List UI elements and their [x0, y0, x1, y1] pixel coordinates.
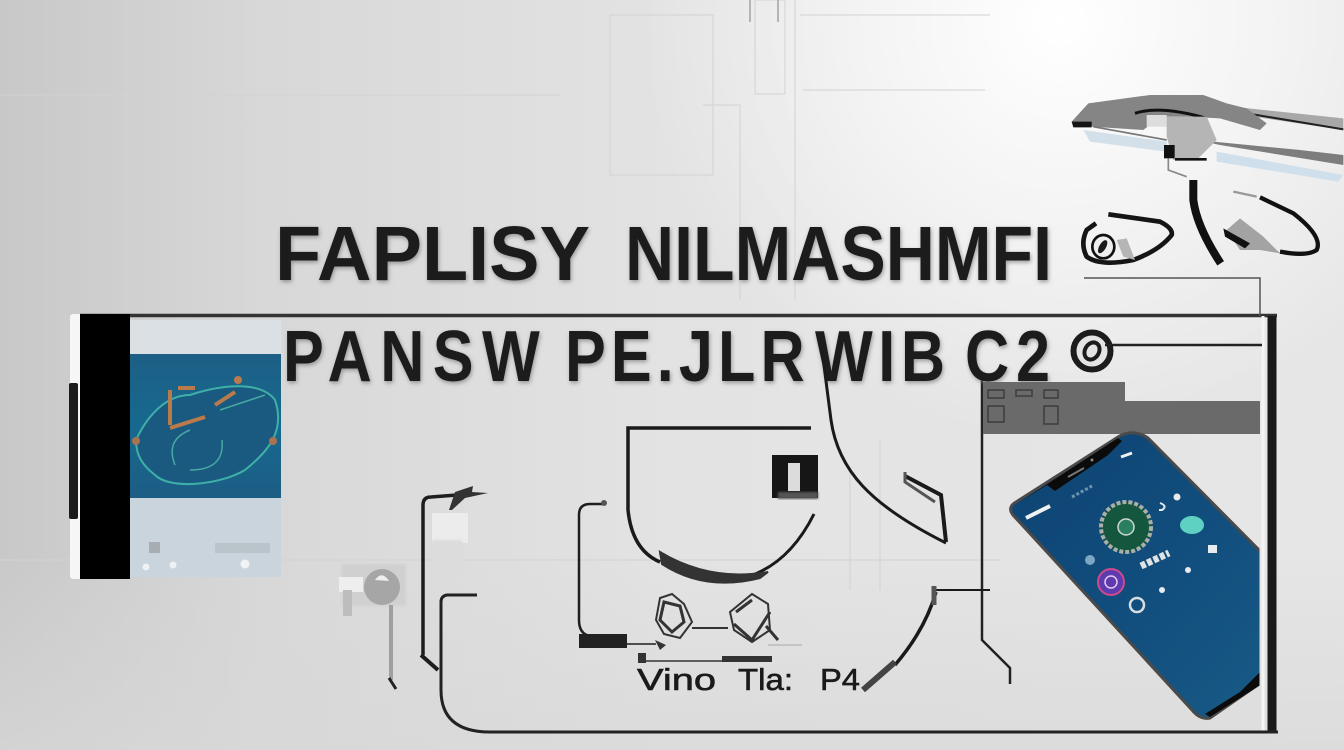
subtitle: C2	[965, 317, 1050, 397]
icon: mechanical arm tool with cables and band	[1072, 95, 1343, 263]
caption label: Vino	[637, 662, 716, 697]
title: NILMASHMFI	[625, 211, 1052, 297]
curve: lower right bracket	[863, 586, 990, 690]
title	[275, 211, 1052, 297]
icon: square connector	[772, 455, 818, 499]
icon: valve fitting	[339, 564, 406, 689]
left connector bracket	[421, 486, 488, 670]
subtitle: PANSW	[283, 317, 540, 397]
title: FAPLISY	[275, 211, 590, 297]
curve: right bracket	[822, 350, 946, 543]
caption label: P4	[820, 662, 860, 697]
curve: large U bracket	[628, 428, 814, 583]
icon: ring at end of subtitle	[1074, 332, 1262, 370]
header strip: dark toolbar	[983, 382, 1260, 434]
main frame lines	[80, 278, 1278, 732]
subtitle	[283, 317, 1050, 397]
subtitle: PE.JLR	[565, 317, 805, 397]
tablet screen map image	[130, 354, 281, 498]
caption label: Tla:	[738, 662, 793, 697]
icon: twin hexagon molecule	[656, 594, 778, 642]
panel: tablet device	[69, 314, 281, 579]
phone app icons	[1085, 494, 1217, 612]
caption label	[637, 662, 860, 697]
icon: phone	[1011, 433, 1262, 718]
caption rule	[638, 645, 802, 663]
center connector bracket	[579, 500, 666, 650]
subtitle: WIB	[815, 317, 945, 397]
